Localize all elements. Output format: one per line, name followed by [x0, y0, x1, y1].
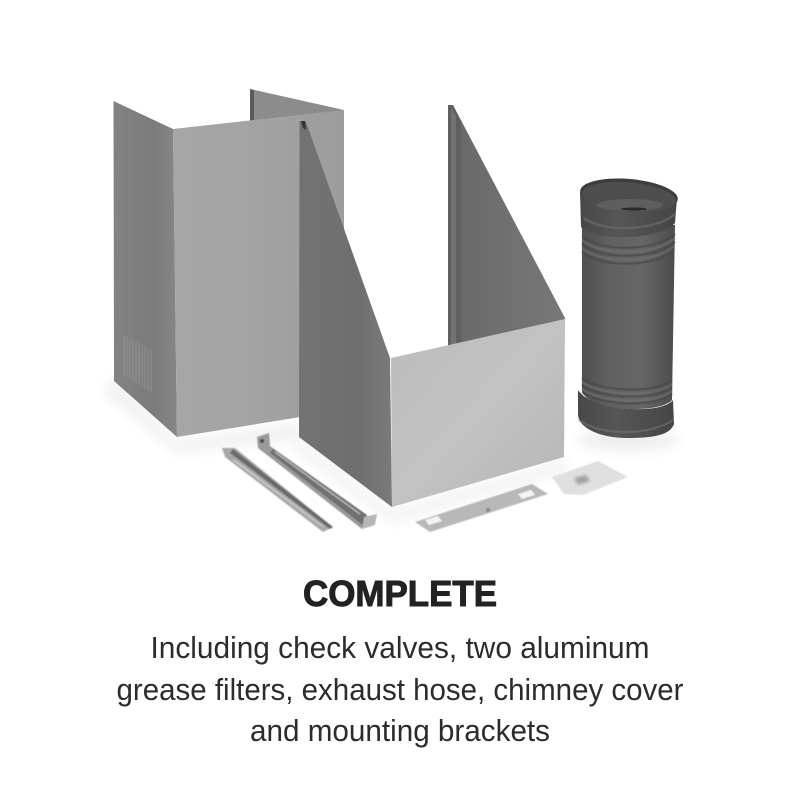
- mounting plate: [415, 484, 548, 532]
- description text: Including check valves, two aluminum: [150, 630, 650, 665]
- front face: [391, 319, 565, 507]
- heading: COMPLETE: [303, 573, 497, 614]
- upper collar: [580, 192, 677, 237]
- exhaust hose: [578, 175, 679, 438]
- lower collar: [578, 390, 674, 438]
- chimney cover: front piece: [299, 105, 565, 507]
- description text: [116, 630, 684, 748]
- rear inner panel: [250, 89, 344, 230]
- rim and opening: [579, 175, 679, 215]
- mounting bracket right: [257, 433, 377, 529]
- mounting bracket left: [222, 448, 333, 532]
- hose body: [582, 225, 675, 409]
- left triangular flank: [299, 121, 392, 507]
- screw bag: [552, 461, 628, 495]
- chimney cover: rear piece: [114, 89, 344, 437]
- rear right triangular panel: [448, 105, 565, 360]
- left flank with vents: [114, 101, 177, 437]
- description text: and mounting brackets: [250, 713, 550, 748]
- description text: grease filters, exhaust hose, chimney cover: [116, 672, 684, 707]
- front face: [173, 110, 344, 437]
- ribs: [582, 234, 675, 404]
- floor shadows: [105, 378, 678, 522]
